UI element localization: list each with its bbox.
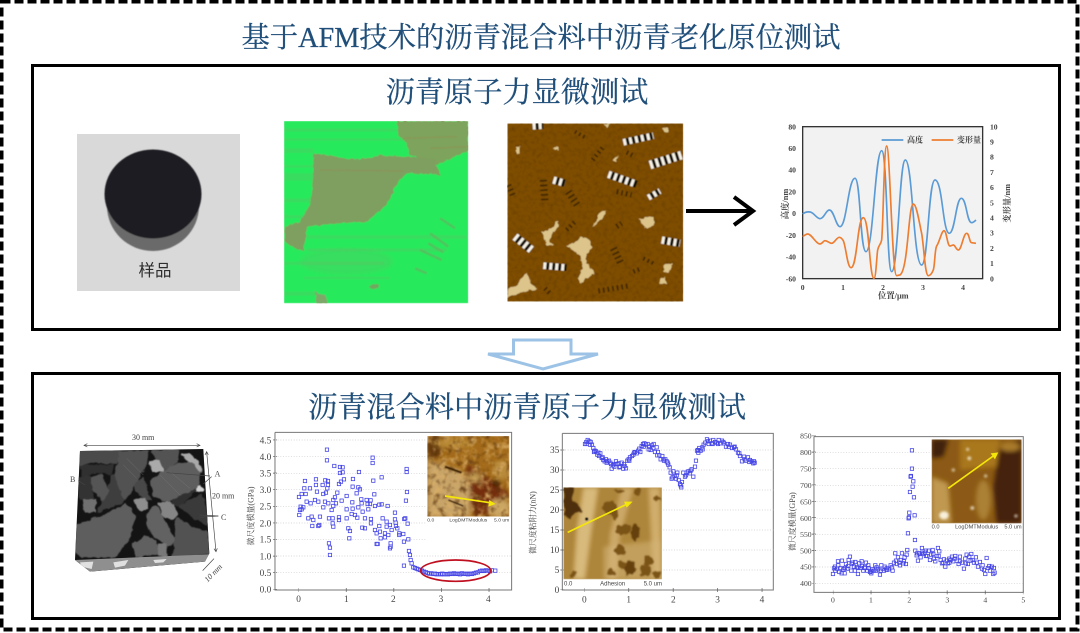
inset caption A: 0.0 — [427, 518, 434, 524]
tick labels C: 700 — [800, 481, 812, 490]
scatter chart: adhesion vs position: 0 — [582, 595, 587, 605]
yellow arrow C — [948, 452, 998, 488]
tick labels A: 2.5 — [260, 503, 272, 513]
scatter chart: modulus vs position C: 2 — [907, 595, 911, 604]
scatter chart: modulus vs position A: 3 — [439, 595, 444, 605]
tick labels A: 4.5 — [260, 436, 272, 446]
x axis labels: 1 — [841, 283, 845, 292]
A data points — [299, 450, 495, 574]
tick labels A: 3.0 — [260, 486, 272, 496]
legend — [882, 135, 981, 145]
x axis labels — [801, 283, 965, 292]
line chart: height and deformation — [780, 122, 1012, 301]
tick labels B: 30 — [550, 466, 560, 476]
left axis labels: -60 — [786, 274, 796, 283]
specimen dimension labels: 30 mm — [132, 433, 155, 442]
panel heading: asphalt AFM test: 沥青原子力显微测试 — [386, 76, 648, 109]
tick labels C: 750 — [800, 464, 812, 473]
tick labels A: 3.5 — [260, 470, 272, 480]
specimen dimension labels: 20 mm — [212, 492, 235, 501]
right axis labels: 0 — [990, 274, 994, 283]
y axis title B: 微尺度粘附力(nN) — [527, 491, 537, 554]
right axis labels: 9 — [990, 137, 994, 146]
AFM inset B — [563, 487, 662, 588]
asphalt mixture specimen — [75, 449, 209, 572]
arrow to chart — [686, 197, 753, 225]
tick labels A — [260, 436, 272, 596]
scatter chart: modulus vs position A — [245, 432, 512, 605]
tick labels C — [800, 431, 812, 588]
scatter chart: modulus vs position C: 3 — [945, 595, 949, 604]
panel heading: mixture AFM test: 沥青混合料中沥青原子力显微测试 — [308, 391, 746, 424]
legend: 变形量 — [957, 135, 981, 145]
left axis labels: 20 — [788, 187, 796, 196]
tick labels C: 850 — [800, 431, 812, 440]
yellow arrow A — [445, 496, 496, 507]
right axis labels: 10 — [990, 122, 998, 131]
brown AFM deformation image — [507, 123, 683, 302]
scatter chart: modulus vs position C: 1 — [869, 595, 873, 604]
inset caption A: LogDMTModulus — [449, 518, 488, 524]
right axis labels: 3 — [990, 229, 994, 238]
tick labels C: 500 — [800, 546, 812, 555]
right axis labels: 4 — [990, 214, 994, 223]
inset caption C: 0.0 — [932, 525, 940, 531]
tick labels B: 5 — [555, 566, 560, 576]
scatter chart: adhesion vs position: 4 — [760, 595, 765, 605]
right axis labels: 6 — [990, 183, 994, 192]
right axis labels — [990, 122, 998, 283]
legend: 高度 — [907, 135, 923, 145]
scatter chart: modulus vs position A: 1 — [344, 595, 349, 605]
green AFM height image — [284, 121, 468, 303]
tick labels A: 2.0 — [260, 519, 272, 529]
yellow arrow B — [568, 502, 633, 532]
scatter chart: modulus vs position C: 5 — [1021, 595, 1025, 604]
y axis title C: 微尺度模量(GPa) — [787, 492, 797, 551]
left axis labels: 0 — [792, 209, 796, 218]
left axis labels: 60 — [788, 144, 796, 153]
scatter chart: modulus vs position C — [787, 431, 1025, 604]
left axis labels: -40 — [786, 253, 796, 262]
x axis labels: 3 — [921, 283, 925, 292]
axis titles — [780, 184, 1012, 301]
scatter chart: adhesion vs position: 1 — [626, 595, 631, 605]
panel: asphalt in mixture AFM test — [32, 374, 1060, 618]
tick labels B: 20 — [550, 506, 560, 516]
sample disk — [104, 150, 202, 251]
specimen dimension labels: C — [221, 513, 226, 522]
tick labels A: 0.0 — [260, 586, 272, 596]
inset caption C — [932, 525, 1022, 531]
right axis labels: 7 — [990, 168, 994, 177]
panel: asphalt AFM test — [32, 66, 1060, 330]
right axis labels: 5 — [990, 198, 994, 207]
C data points — [833, 450, 995, 575]
deformation curve — [803, 146, 976, 278]
inset caption A — [427, 518, 509, 524]
tick labels A: 1.0 — [260, 552, 272, 562]
inset caption B: 0.0 — [564, 582, 573, 588]
right axis labels: 8 — [990, 153, 994, 162]
tick labels B: 35 — [550, 446, 560, 456]
block arrow between panels — [488, 340, 598, 369]
tick labels B: 0 — [555, 586, 560, 596]
tick labels C: 450 — [800, 563, 812, 572]
tick labels B: 25 — [550, 486, 560, 496]
left axis labels — [786, 122, 796, 283]
scatter chart: modulus vs position A: 2 — [391, 595, 396, 605]
specimen dimensions — [70, 433, 235, 584]
axis titles: 高度/nm — [780, 189, 790, 219]
scatter chart: adhesion vs position — [527, 433, 773, 605]
specimen dimension labels — [70, 433, 235, 584]
specimen dimension labels: A — [215, 470, 221, 479]
tick labels C: 650 — [800, 497, 812, 506]
x axis labels: 0 — [801, 283, 805, 292]
left axis labels: 40 — [788, 166, 796, 175]
specimen dimension labels: B — [70, 475, 75, 484]
left axis labels: 80 — [788, 122, 796, 131]
tick labels C: 800 — [800, 448, 812, 457]
right axis labels: 1 — [990, 259, 994, 268]
x axis labels: 2 — [881, 283, 885, 292]
x axis labels: 4 — [961, 283, 965, 292]
scatter chart: modulus vs position C: 4 — [983, 595, 987, 604]
axis titles: 位置/μm — [878, 291, 909, 301]
y axis title A: 微尺度模量(GPa) — [245, 486, 255, 545]
inset caption B — [564, 582, 662, 588]
right axis labels: 2 — [990, 244, 994, 253]
red ellipse highlight — [421, 560, 491, 581]
inset caption B: Adhesion — [600, 582, 625, 588]
tick labels B — [550, 446, 560, 596]
scatter chart: modulus vs position A: 4 — [486, 595, 491, 605]
sample photo — [77, 134, 240, 291]
axis titles: 变形量/nm — [1002, 184, 1012, 223]
adhesion data points — [585, 439, 755, 487]
inset caption C: 5.0 um — [1004, 525, 1022, 531]
specimen dimension labels: 10 mm — [203, 562, 224, 584]
AFM inset A — [427, 435, 510, 524]
AFM inset C — [932, 439, 1022, 531]
tick labels C: 400 — [800, 579, 812, 588]
tick labels A: 4.0 — [260, 453, 272, 463]
tick labels A: 1.5 — [260, 536, 272, 546]
inset caption A: 5.0 um — [494, 518, 509, 524]
left axis labels: -20 — [786, 231, 796, 240]
tick labels C: 600 — [800, 514, 812, 523]
tick labels B: 10 — [550, 546, 560, 556]
inset caption B: 5.0 um — [644, 582, 662, 588]
scatter chart: modulus vs position C: 0 — [831, 595, 835, 604]
tick labels B: 15 — [550, 526, 560, 536]
scatter chart: modulus vs position A: 0 — [296, 595, 301, 605]
title: 基于AFM技术的沥青混合料中沥青老化原位测试 — [242, 22, 840, 54]
tick labels C: 550 — [800, 530, 812, 539]
sample label: 样品 — [138, 261, 172, 280]
height curve — [803, 151, 976, 272]
inset caption C: LogDMTModulus — [955, 525, 998, 531]
scatter chart: adhesion vs position: 3 — [715, 595, 720, 605]
scatter chart: adhesion vs position: 2 — [671, 595, 676, 605]
tick labels A: 0.5 — [260, 569, 272, 579]
